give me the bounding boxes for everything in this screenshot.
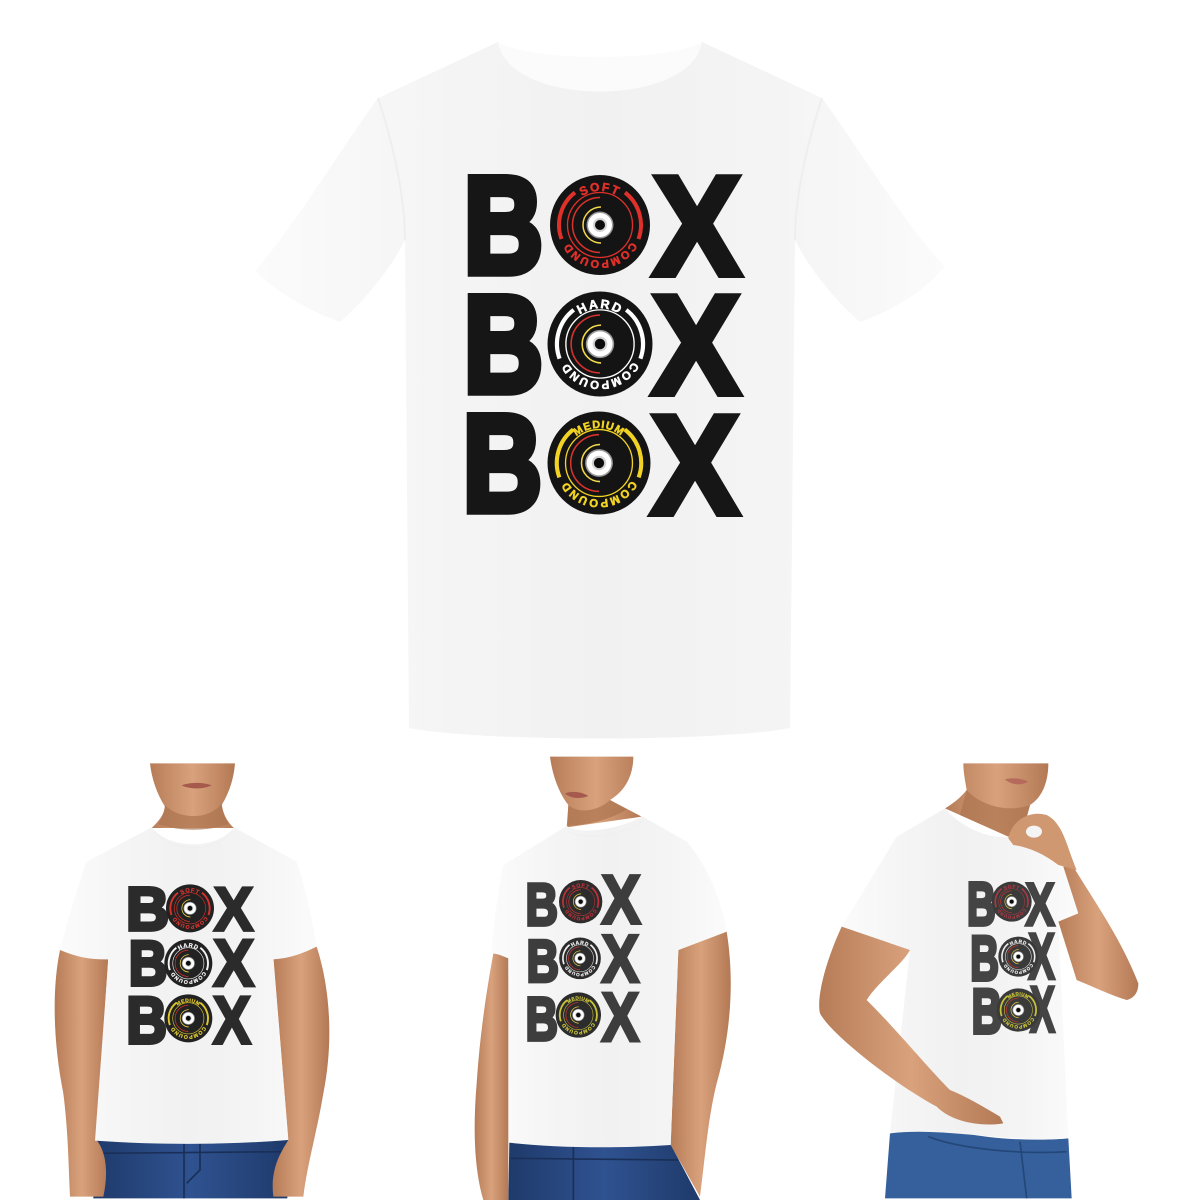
row 2 X: X	[1028, 920, 1055, 993]
row 1 X: X	[1025, 870, 1055, 939]
row 3 X: X	[1030, 972, 1055, 1047]
row 3 B: B	[526, 985, 558, 1054]
row 3 X: X	[601, 978, 639, 1056]
tyre: medium compound: COMPOUND	[562, 482, 636, 508]
hard tyre	[559, 938, 601, 980]
row 2 letter X: X	[652, 266, 740, 425]
medium tyre: COMPOUND	[562, 1023, 595, 1034]
medium tyre: MEDIUM	[566, 996, 590, 1003]
soft tyre: COMPOUND	[565, 910, 596, 920]
print	[967, 869, 1056, 1047]
medium tyre	[164, 994, 212, 1042]
tyre: hard compound: HARD	[576, 299, 622, 314]
head and neck	[550, 757, 642, 827]
row 3 letter X: X	[650, 386, 740, 545]
print: BOX BOX BOX with tyres	[463, 147, 746, 545]
left arm	[55, 950, 108, 1197]
t-shirt body	[255, 42, 945, 738]
gap between fingers	[1026, 826, 1042, 838]
hard tyre	[998, 936, 1038, 977]
collar line	[568, 821, 643, 836]
head and neck	[150, 763, 235, 828]
hard tyre: COMPOUND	[1004, 964, 1033, 974]
soft tyre	[992, 882, 1032, 922]
row 1 X: X	[214, 875, 254, 944]
hard tyre	[164, 939, 212, 988]
row 1 B: B	[526, 872, 558, 938]
collar	[498, 42, 702, 92]
row 1 X: X	[601, 862, 641, 939]
row 3 B: B	[972, 976, 1002, 1047]
t-shirt	[60, 827, 317, 1144]
row 2 X: X	[213, 927, 254, 1001]
jeans	[885, 1123, 1072, 1198]
lips	[182, 783, 212, 788]
t-shirt	[842, 808, 1078, 1139]
raised hand	[1008, 814, 1077, 870]
lips	[565, 792, 588, 798]
row 1 letter B: B	[464, 150, 543, 302]
soft tyre: SOFT	[180, 888, 200, 894]
tyre: hard compound: COMPOUND	[562, 363, 638, 390]
row 3 B: B	[126, 984, 167, 1057]
neck shadow	[158, 803, 228, 830]
t-shirt	[492, 816, 727, 1147]
medium tyre: MEDIUM	[1007, 992, 1029, 998]
right arm	[1058, 867, 1138, 1000]
row 2 X: X	[601, 921, 639, 997]
row 3 letter B: B	[463, 388, 542, 540]
row 1 letter X: X	[652, 147, 742, 306]
row 2 B: B	[527, 928, 559, 995]
head and neck	[945, 763, 1048, 837]
row 1 B: B	[967, 869, 996, 938]
panel: model front view	[54, 763, 330, 1198]
neck shadow	[960, 790, 1030, 837]
jeans	[93, 1138, 288, 1198]
row 3 X: X	[213, 981, 251, 1058]
left arm	[475, 953, 508, 1200]
tyre: medium compound	[548, 412, 650, 514]
lips	[1005, 778, 1028, 784]
jeans	[508, 1143, 700, 1200]
jeans seams	[928, 1137, 1067, 1198]
hard tyre: COMPOUND	[565, 966, 596, 976]
collar line	[155, 832, 232, 848]
panel: main t-shirt	[370, 42, 844, 738]
hard tyre: HARD	[570, 940, 588, 946]
soft tyre: COMPOUND	[173, 917, 208, 929]
soft tyre: COMPOUND	[998, 909, 1026, 919]
hard tyre: COMPOUND	[171, 972, 206, 984]
right arm	[671, 932, 731, 1197]
row 1 B: B	[126, 874, 169, 943]
row 2 B: B	[970, 923, 999, 994]
print	[526, 862, 642, 1056]
soft tyre: SOFT	[572, 883, 590, 889]
jeans fly	[97, 1141, 287, 1198]
right arm	[273, 947, 329, 1197]
soft tyre	[166, 884, 214, 932]
medium tyre	[556, 992, 601, 1038]
hard tyre: HARD	[178, 942, 198, 950]
soft tyre: SOFT	[1004, 884, 1020, 890]
tyre: soft compound: SOFT	[579, 182, 620, 196]
tyre: soft compound: COMPOUND	[564, 243, 636, 268]
row 2 letter B: B	[464, 269, 543, 421]
panel: model three-quarter view	[474, 756, 731, 1200]
hard tyre: HARD	[1009, 940, 1026, 946]
medium tyre: COMPOUND	[171, 1027, 206, 1039]
tyre: soft compound	[550, 175, 650, 275]
row 2 B: B	[129, 929, 167, 999]
medium tyre: MEDIUM	[176, 998, 200, 1006]
left arm and pocket hand	[819, 927, 1003, 1124]
neck shadow	[567, 800, 627, 826]
armhole seams	[378, 98, 822, 240]
print	[126, 874, 256, 1058]
soft tyre	[559, 880, 602, 924]
tyre: hard compound	[548, 292, 652, 396]
panel: model side view	[819, 763, 1138, 1198]
tyre: medium compound: MEDIUM	[573, 420, 625, 436]
medium tyre	[996, 988, 1040, 1032]
medium tyre: COMPOUND	[1003, 1018, 1034, 1029]
jeans seams	[511, 1145, 678, 1200]
